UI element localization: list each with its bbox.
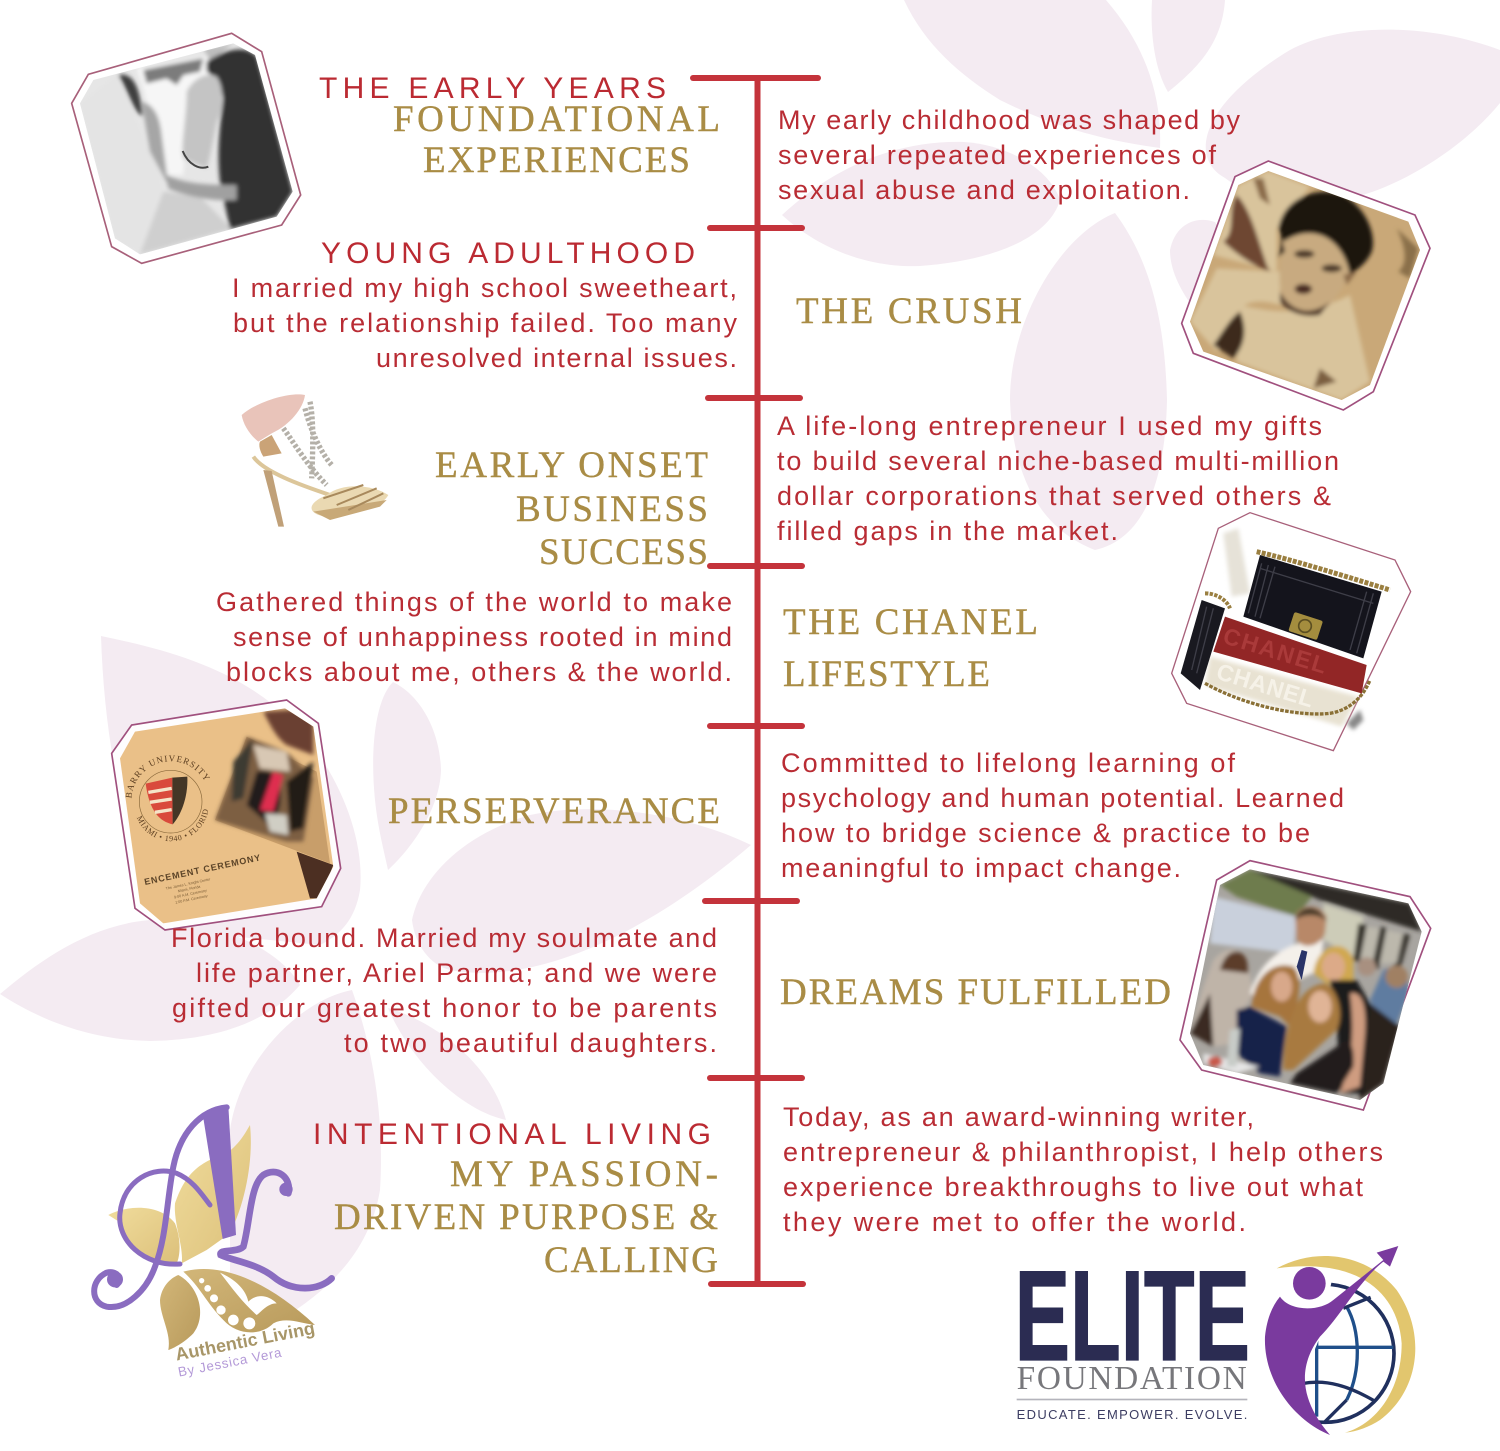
photo: baby portrait [1180, 160, 1431, 411]
logo: authentic living: Authentic Living [174, 1318, 316, 1365]
text: early childhood: sexual abuse and exploitation. [778, 175, 1190, 205]
logo: elite foundation [1015, 1245, 1415, 1435]
photo: commencement program: 9:00 A.M. Ceremony [174, 889, 207, 899]
heading: early onset business success: SUCCESS [539, 532, 708, 573]
text: gathered things: sense of unhappiness rooted in mind [233, 622, 732, 652]
heading: intentional living: CALLING [544, 1240, 718, 1281]
photo: commencement program: MIAMI • 1940 • FLORIDA [136, 809, 208, 842]
heading: intentional living [313, 1118, 718, 1281]
text: lifelong learning: psychology and human potential. Learned [781, 783, 1344, 813]
logo: elite foundation: ELITE [1015, 1245, 1250, 1388]
text: entrepreneur: dollar corporations that served others & [777, 481, 1331, 511]
text: gathered things: blocks about me, others & the world. [226, 657, 732, 687]
text: young adulthood: but the relationship failed. Too many [233, 308, 738, 338]
heading: the early years [319, 72, 720, 181]
heading: the chanel lifestyle [783, 602, 1038, 695]
photo: commencement program: 1:00 P.M. Ceremony [175, 894, 208, 905]
text: gathered things [216, 587, 732, 687]
heading: perserverance: PERSERVERANCE [388, 791, 720, 832]
photo: commencement program: ENCEMENT CEREMONY [143, 853, 261, 887]
text: florida bound: Florida bound. Married my soulmate and [171, 923, 717, 953]
text: today: entrepreneur & philanthropist, I help others [783, 1137, 1383, 1167]
text: early childhood: several repeated experiences of [778, 140, 1216, 170]
background flower: bottom left [0, 636, 751, 1320]
heading: early onset business success [435, 445, 708, 573]
heading: the early years: THE EARLY YEARS [319, 72, 666, 105]
logo: elite foundation: EDUCATE. EMPOWER. EVOLVE. [1017, 1407, 1247, 1422]
text: today: experience breakthroughs to live out what [783, 1172, 1363, 1202]
text: entrepreneur: filled gaps in the market. [777, 516, 1118, 546]
text: florida bound: to two beautiful daughters. [344, 1028, 717, 1058]
heading: early onset business success: BUSINESS [516, 489, 708, 530]
heading: intentional living: MY PASSION- [450, 1154, 718, 1195]
photo: commencement program: BARRY UNIVERSITY [126, 755, 210, 798]
text: early childhood: My early childhood was shaped by [778, 105, 1240, 135]
text: gathered things: Gathered things of the world to make [216, 587, 732, 617]
text: young adulthood [232, 237, 738, 373]
text: young adulthood: unresolved internal issues. [376, 343, 737, 373]
heading: the chanel lifestyle: THE CHANEL [783, 602, 1038, 643]
text: lifelong learning: how to bridge science & practice to be [781, 818, 1310, 848]
text: lifelong learning [781, 748, 1344, 883]
text: lifelong learning: Committed to lifelong learning of [781, 748, 1235, 778]
photo: chanel handbags: CHANEL [1214, 658, 1317, 712]
text: today [783, 1102, 1383, 1237]
photo: chanel handbags [1172, 513, 1411, 751]
text: florida bound [171, 923, 717, 1058]
photo: chanel handbags: CHANEL [1220, 623, 1330, 679]
text: early childhood [778, 105, 1240, 205]
photo: commencement program [110, 699, 342, 931]
text: entrepreneur [777, 411, 1339, 546]
text: entrepreneur: A life-long entrepreneur I used my gifts [777, 411, 1322, 441]
text: lifelong learning: meaningful to impact change. [781, 853, 1181, 883]
text: young adulthood: YOUNG ADULTHOOD [321, 237, 695, 270]
photo: jewelled high heel shoe [242, 394, 388, 527]
icon: globe [1256, 1246, 1415, 1435]
logo: authentic living [94, 1106, 332, 1380]
photo: commencement program: The James L. Knight Center [165, 877, 212, 891]
photo: family group [1170, 860, 1440, 1120]
heading: intentional living: DRIVEN PURPOSE & [334, 1197, 718, 1238]
text: today: they were met to offer the world. [783, 1207, 1246, 1237]
logo: authentic living: By Jessica Vera [177, 1345, 283, 1380]
timeline [690, 75, 821, 1287]
text: today: Today, as an award-winning writer, [783, 1102, 1254, 1132]
text: florida bound: gifted our greatest honor to be parents [172, 993, 717, 1023]
heading: the early years: FOUNDATIONAL [393, 99, 720, 140]
photo: commencement program: Miami, Florida [177, 884, 202, 893]
heading: the crush: THE CRUSH [796, 291, 1022, 332]
photo: wedding couple [70, 32, 302, 264]
logo: elite foundation: FOUNDATION [1017, 1360, 1247, 1397]
heading: intentional living: INTENTIONAL LIVING [313, 1118, 711, 1151]
heading: dreams fulfilled: DREAMS FULFILLED [780, 972, 1171, 1013]
heading: the chanel lifestyle: LIFESTYLE [783, 654, 990, 695]
heading: early onset business success: EARLY ONSET [435, 445, 708, 486]
text: entrepreneur: to build several niche-based multi-million [777, 446, 1339, 476]
text: florida bound: life partner, Ariel Parma; and we were [196, 958, 717, 988]
text: young adulthood: I married my high school sweetheart, [232, 273, 737, 303]
heading: the early years: EXPERIENCES [423, 140, 690, 181]
background flower: top right [782, 0, 1500, 550]
